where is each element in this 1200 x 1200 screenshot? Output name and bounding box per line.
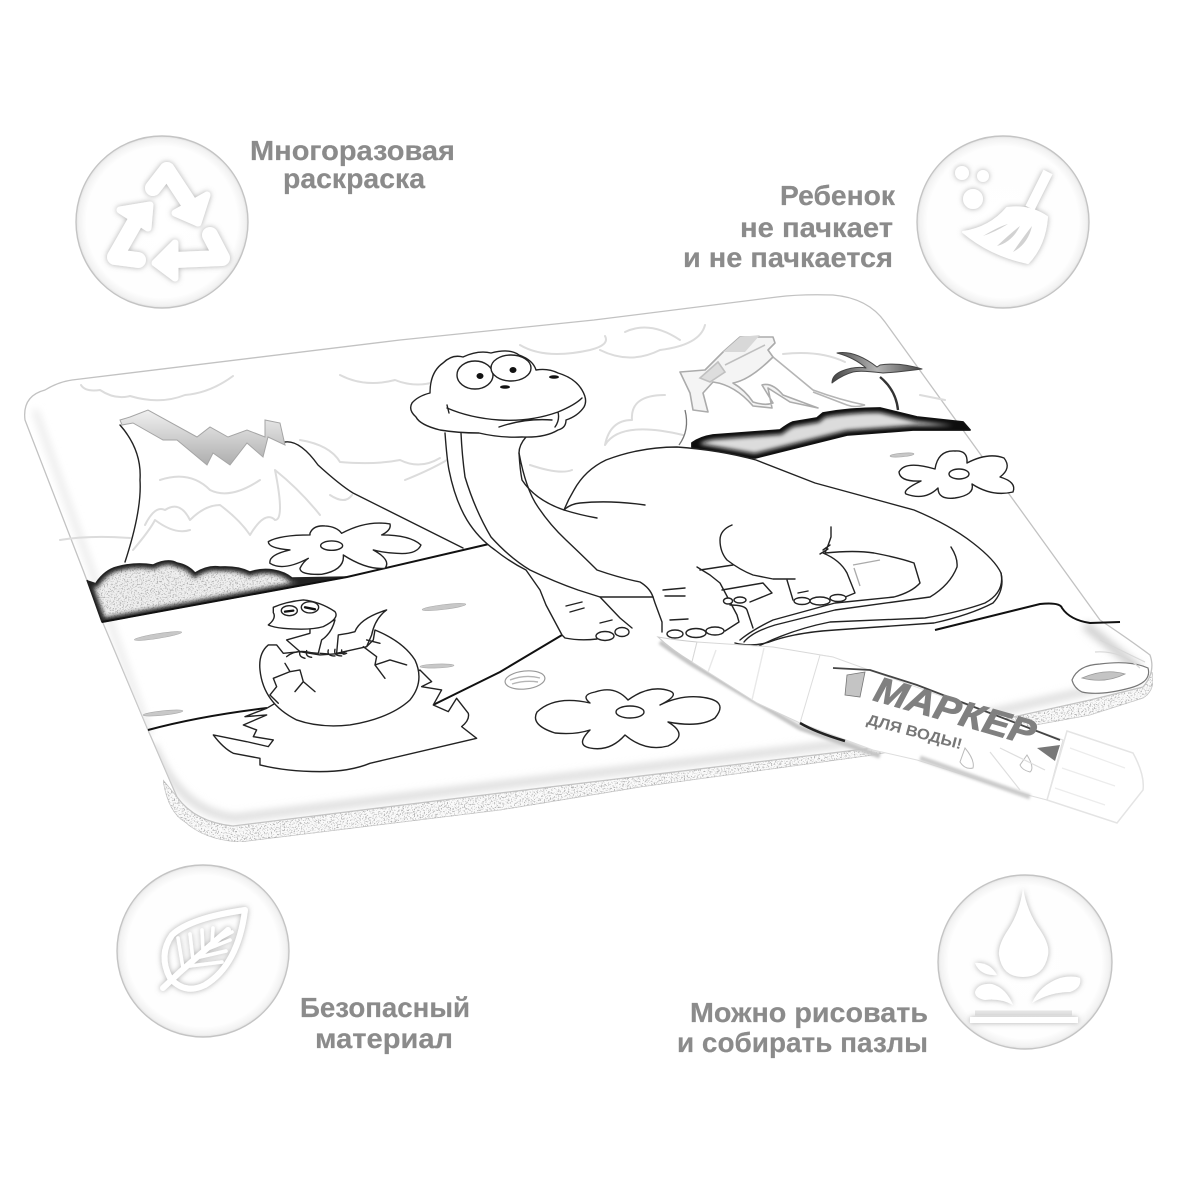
hatchling head	[268, 600, 336, 629]
egg	[260, 630, 419, 726]
icon circle	[117, 865, 289, 1037]
grass	[213, 670, 477, 772]
hatchling hands	[287, 649, 347, 658]
shell right	[1072, 640, 1149, 693]
icon: leaf	[163, 910, 245, 989]
dinosaur back and tail	[519, 437, 1002, 645]
text: материал	[315, 1023, 453, 1054]
board thickness edge	[163, 672, 1153, 842]
flower: upper right	[899, 451, 1014, 498]
marker label top stripe	[833, 668, 1060, 740]
text	[250, 135, 455, 194]
marker label triangle	[1037, 745, 1060, 761]
marker tip	[658, 637, 697, 662]
text: не пачкает	[740, 212, 893, 243]
clouds	[60, 325, 945, 540]
text: Ребенок	[780, 180, 896, 211]
icon: broom and bubbles	[956, 167, 1048, 263]
feature: safe material	[117, 865, 470, 1054]
hatchling neck	[287, 620, 335, 653]
leg wrinkles	[566, 588, 808, 623]
text: Безопасный	[300, 992, 470, 1023]
feature: draw and assemble puzzles	[677, 875, 1112, 1058]
marker brand tag	[845, 672, 865, 697]
tail under lines	[740, 552, 920, 640]
egg cracks	[270, 640, 407, 703]
text: Можно рисовать	[690, 997, 928, 1028]
flower: bottom centre	[535, 689, 720, 749]
hind leg	[787, 527, 855, 600]
feature: child stays clean	[683, 136, 1089, 308]
lava flow	[680, 337, 818, 412]
dinosaur smile	[447, 398, 582, 427]
marker	[658, 637, 1143, 823]
neck inner line	[461, 433, 653, 597]
marker collar	[692, 642, 833, 723]
marker heading: МАРКЕР	[870, 668, 1042, 754]
marker water splash on label	[960, 748, 1032, 772]
icon circle	[938, 875, 1112, 1049]
marker shadow	[660, 642, 880, 756]
right volcano	[679, 335, 865, 445]
dinosaur	[411, 351, 1002, 647]
text	[677, 997, 928, 1058]
left dark hill	[87, 561, 347, 622]
marker cap	[1047, 731, 1143, 823]
product: coloring board	[25, 295, 1153, 842]
text	[300, 992, 470, 1054]
palm tree	[832, 353, 922, 410]
front right leg	[653, 567, 739, 632]
icon: water drop with splash	[970, 888, 1080, 1023]
text: Многоразовая	[250, 135, 455, 166]
text: и собирать пазлы	[677, 1027, 928, 1058]
dinosaur toes	[596, 594, 846, 640]
text: раскраска	[283, 163, 425, 194]
dinosaur white body fill	[445, 433, 1001, 639]
water ripples	[134, 452, 914, 717]
shell small	[504, 669, 546, 691]
water and ground lines	[102, 544, 1120, 730]
board inner shading	[35, 410, 1143, 818]
icon circle	[76, 136, 248, 308]
hatchling tail	[337, 610, 387, 653]
flower: left	[268, 523, 421, 574]
water line	[975, 1010, 1072, 1016]
board top surface	[25, 295, 1152, 826]
text: и не пачкается	[683, 242, 893, 273]
hatching baby dinosaur and egg	[213, 600, 477, 772]
belly and chest	[564, 502, 795, 579]
icon: recycling arrows	[115, 170, 222, 278]
right dark hill	[692, 408, 970, 458]
dinosaur head	[411, 351, 586, 437]
feature: reusable coloring	[76, 135, 455, 308]
broom bristles	[983, 224, 1032, 252]
volcano snow cap	[120, 410, 285, 465]
front left leg	[600, 597, 632, 628]
left volcano	[120, 410, 463, 562]
text	[683, 180, 896, 273]
marker barrel	[800, 655, 1063, 800]
marker subheading: ДЛЯ ВОДЫ!	[865, 711, 964, 753]
icon circle	[917, 136, 1089, 308]
back hidden leg	[700, 565, 772, 628]
dinosaur outer neck	[445, 433, 597, 640]
